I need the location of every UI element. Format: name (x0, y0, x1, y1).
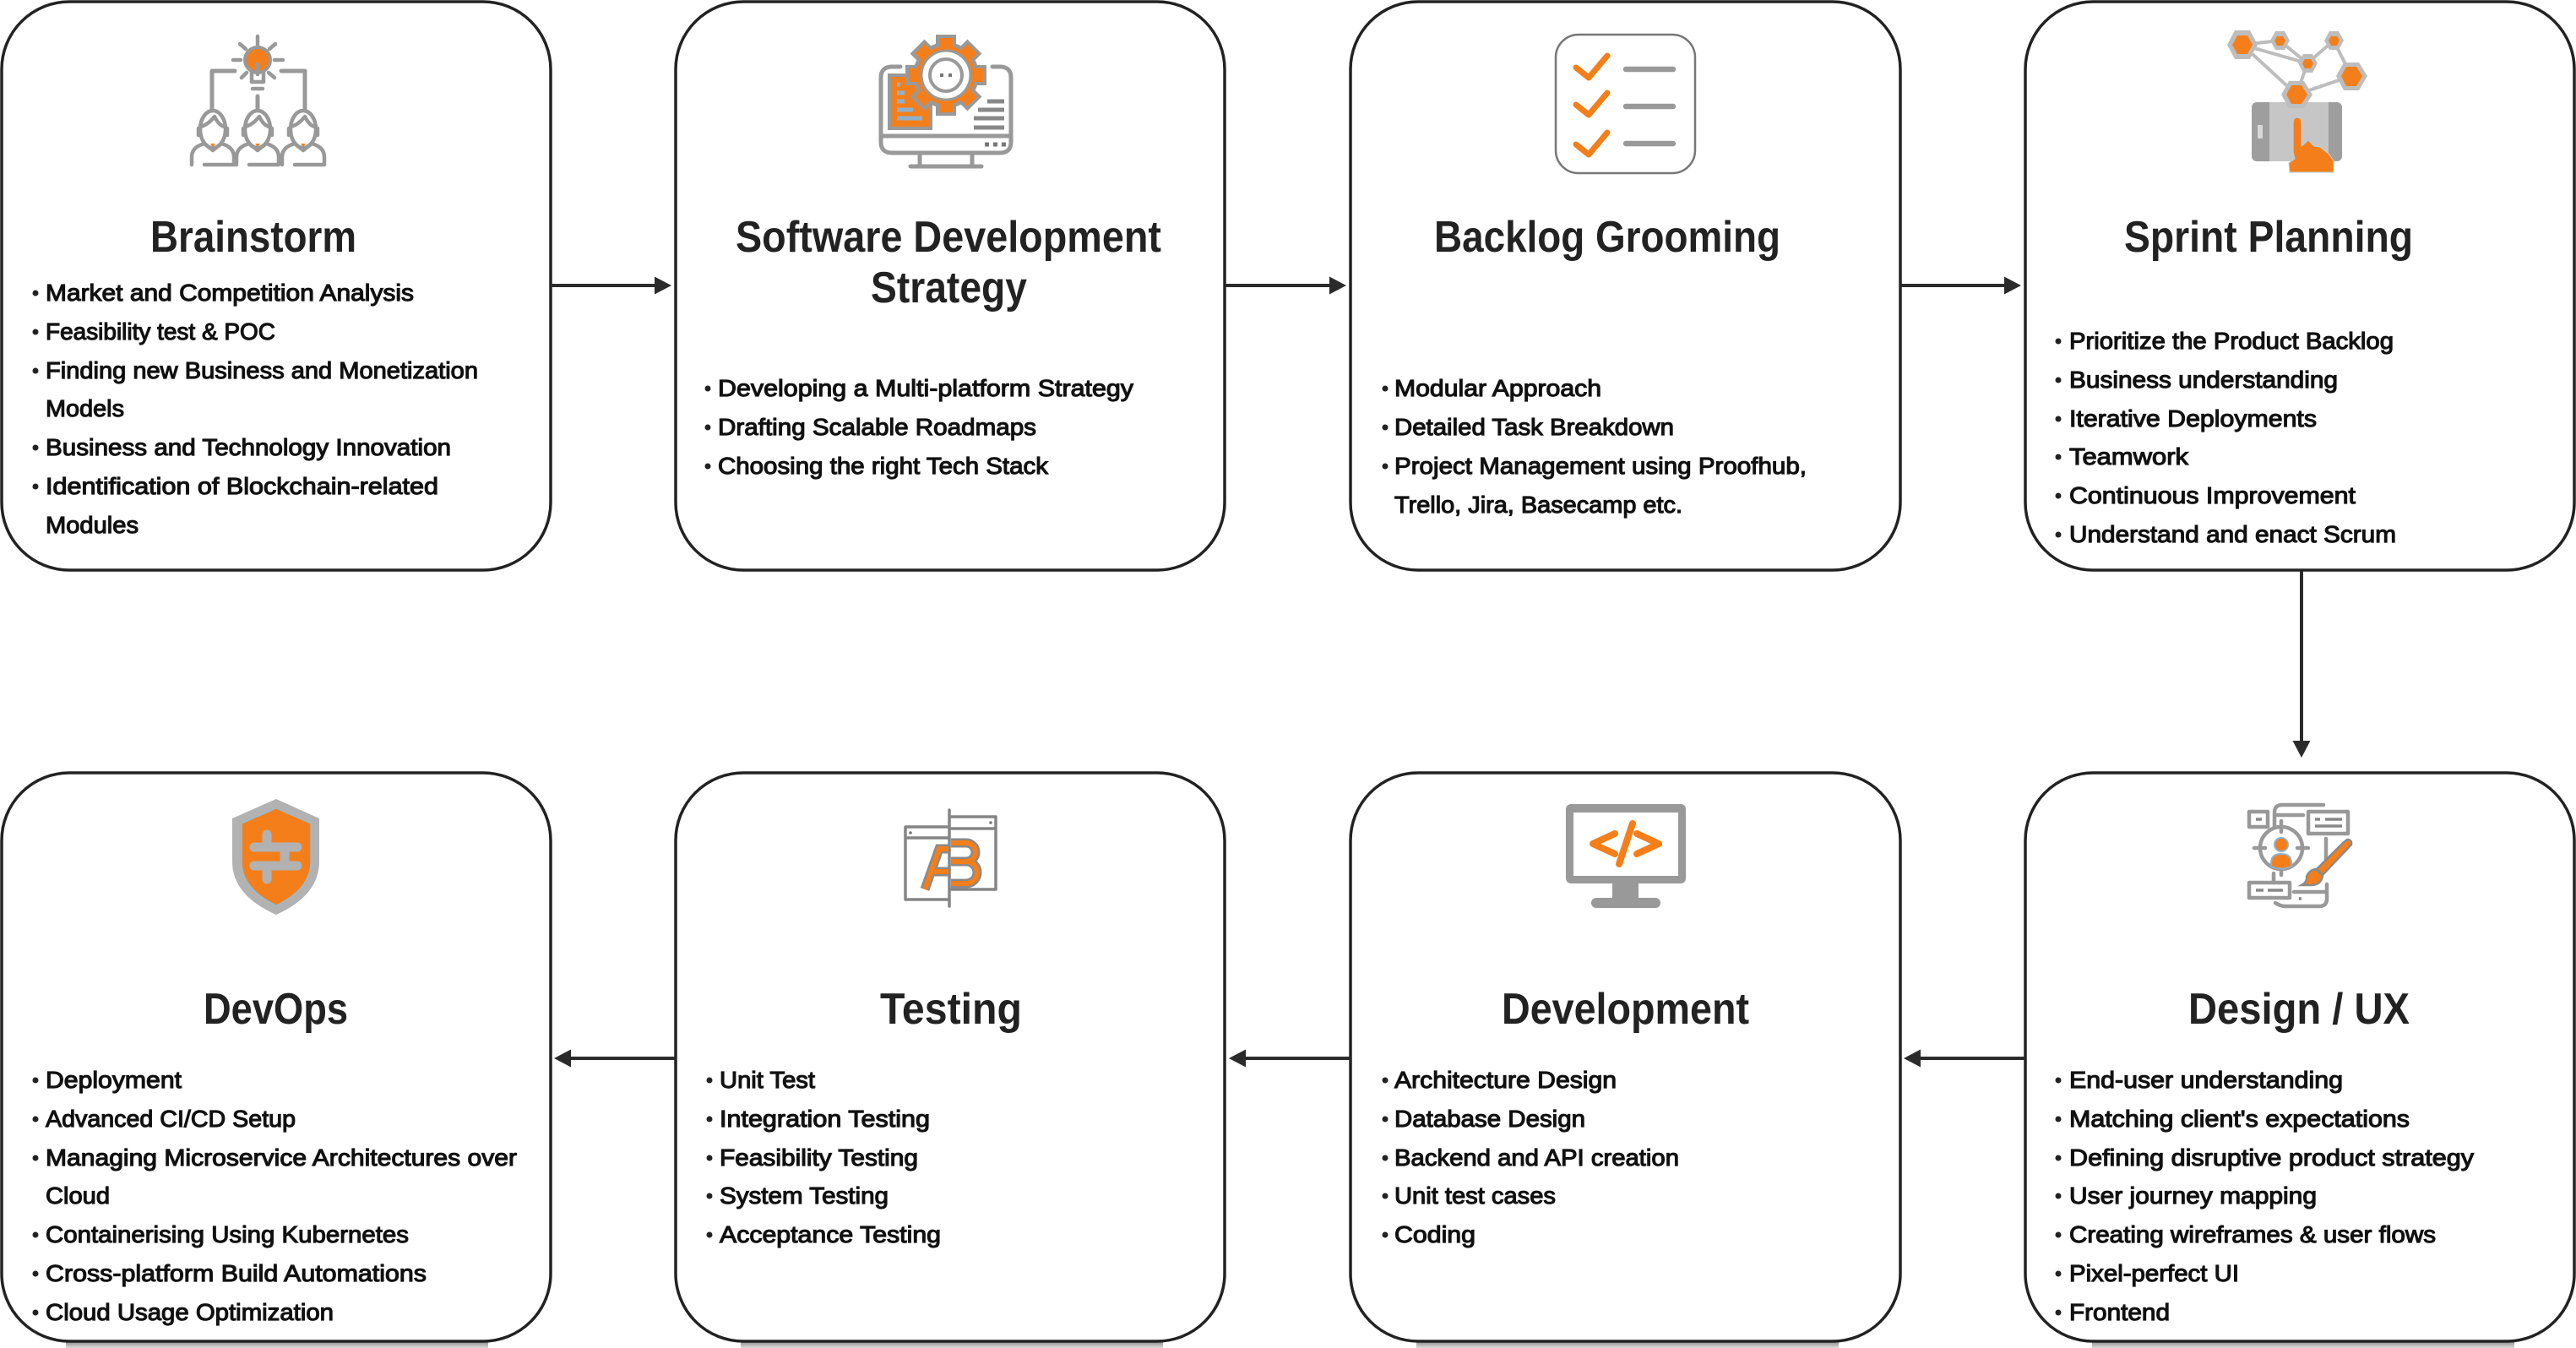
arrow: Development to Testing (1229, 1049, 1350, 1068)
bullet list: Creating wireframes & user flows (2069, 1221, 2436, 1247)
panel: Software Development Strategy (676, 2, 1225, 570)
bullet list: Containerising Using Kubernetes (46, 1221, 409, 1247)
heading: Design / UX (2188, 985, 2410, 1034)
bullet list (706, 1067, 941, 1247)
bullet list: Defining disruptive product strategy (2069, 1144, 2474, 1171)
heading: DevOps (204, 985, 348, 1034)
bullet list: Matching client's expectations (2069, 1106, 2410, 1132)
panel: Backlog Grooming (1350, 2, 1900, 570)
arrow: Strategy to Backlog (1226, 277, 1346, 294)
bullet list: Advanced CI/CD Setup (46, 1106, 296, 1132)
heading: Sprint Planning (2124, 213, 2413, 262)
card outline (2, 2, 551, 570)
panel: DevOps (2, 773, 551, 1341)
arrow: Sprint to Design (2292, 571, 2311, 758)
heading: Testing (880, 985, 1022, 1034)
bullet list (704, 375, 1133, 479)
bullet list: Pixel-perfect UI (2069, 1260, 2239, 1286)
bullet list: Modules (46, 512, 139, 538)
bullet list: Drafting Scalable Roadmaps (718, 414, 1036, 440)
bullet list: Continuous Improvement (2069, 482, 2356, 508)
card outline (2, 773, 551, 1341)
icon: code monitor (1566, 804, 1686, 908)
arrow: Brainstorm to Strategy (551, 277, 671, 294)
panel: Development (1350, 773, 1900, 1341)
bullet list: Business understanding (2069, 367, 2338, 393)
bullet list: Choosing the right Tech Stack (718, 453, 1048, 479)
bullet list: Iterative Deployments (2069, 405, 2317, 432)
panel: Sprint Planning (2025, 2, 2574, 570)
bullet list: Unit test cases (1394, 1182, 1556, 1209)
arrow: Design to Development (1904, 1049, 2025, 1068)
bullet list: Unit Test (720, 1067, 815, 1093)
bullet list: Architecture Design (1394, 1067, 1617, 1093)
bullet list: Cloud (46, 1182, 110, 1209)
bullet list: Integration Testing (720, 1106, 930, 1132)
bullet list: Market and Competition Analysis (46, 280, 414, 306)
heading: Brainstorm (150, 213, 356, 262)
bullet list: Models (46, 395, 124, 421)
heading (736, 213, 1161, 313)
bullet list: Project Management using Proofhub, (1394, 453, 1807, 479)
bullet list (2056, 1067, 2474, 1325)
bullet list: Cross-platform Build Automations (46, 1260, 427, 1286)
bullet list: Managing Microservice Architectures over (46, 1144, 517, 1171)
bullet list: Deployment (46, 1067, 182, 1093)
bullet list: Finding new Business and Monetization (46, 357, 478, 383)
icon: checklist (1556, 35, 1695, 173)
bullet list: Coding (1394, 1221, 1475, 1247)
card outline (676, 773, 1225, 1341)
card outline (2025, 2, 2574, 570)
heading: Development (1502, 985, 1749, 1034)
card outline (1350, 773, 1900, 1341)
bullet list (1382, 1067, 1679, 1247)
bullet list (32, 1067, 517, 1325)
heading: Software Development (736, 213, 1161, 262)
heading: Backlog Grooming (1434, 213, 1780, 262)
panel: Testing (676, 773, 1225, 1341)
bullet list: Modular Approach (1394, 375, 1601, 401)
bullet list (32, 280, 478, 538)
heading: Strategy (871, 264, 1027, 313)
bullet list: User journey mapping (2069, 1182, 2317, 1209)
icon: target user and brush (2249, 805, 2351, 906)
bullet list: Business and Technology Innovation (46, 434, 451, 460)
icon: lightbulb and team (192, 36, 324, 165)
bullet list: Teamwork (2069, 443, 2188, 470)
bullet list: Identification of Blockchain-related (46, 473, 438, 499)
bullet list: Feasibility Testing (720, 1144, 918, 1171)
bullet list (2056, 328, 2396, 547)
bullet list: Backend and API creation (1394, 1144, 1679, 1171)
bullet list: Feasibility test & POC (46, 318, 275, 345)
bullet list: Acceptance Testing (720, 1221, 941, 1247)
card outline (1350, 2, 1900, 570)
bullet list: Understand and enact Scrum (2069, 521, 2396, 547)
bullet list: Developing a Multi-platform Strategy (718, 375, 1133, 401)
icon: tablet with hexagon network (2227, 30, 2367, 172)
bullet list: Database Design (1394, 1106, 1585, 1132)
bullet list: Prioritize the Product Backlog (2069, 328, 2394, 354)
bullet list: Cloud Usage Optimization (46, 1299, 334, 1325)
bullet list: System Testing (720, 1182, 889, 1209)
card outline (2025, 773, 2574, 1341)
bullet list: End-user understanding (2069, 1067, 2343, 1093)
bullet list: Detailed Task Breakdown (1394, 414, 1674, 440)
icon: shield (232, 799, 319, 915)
bullet list: Trello, Jira, Basecamp etc. (1394, 492, 1682, 518)
panel: Design / UX (2025, 773, 2574, 1341)
icon: A/B test windows (905, 810, 996, 906)
arrow: Backlog to Sprint (1900, 277, 2021, 294)
panel: Brainstorm (2, 2, 551, 570)
bullet list: Frontend (2069, 1299, 2170, 1325)
card outline (676, 2, 1225, 570)
bullet list (1382, 375, 1807, 518)
arrow: Testing to DevOps (554, 1049, 676, 1068)
icon: monitor with gear (881, 35, 1011, 166)
